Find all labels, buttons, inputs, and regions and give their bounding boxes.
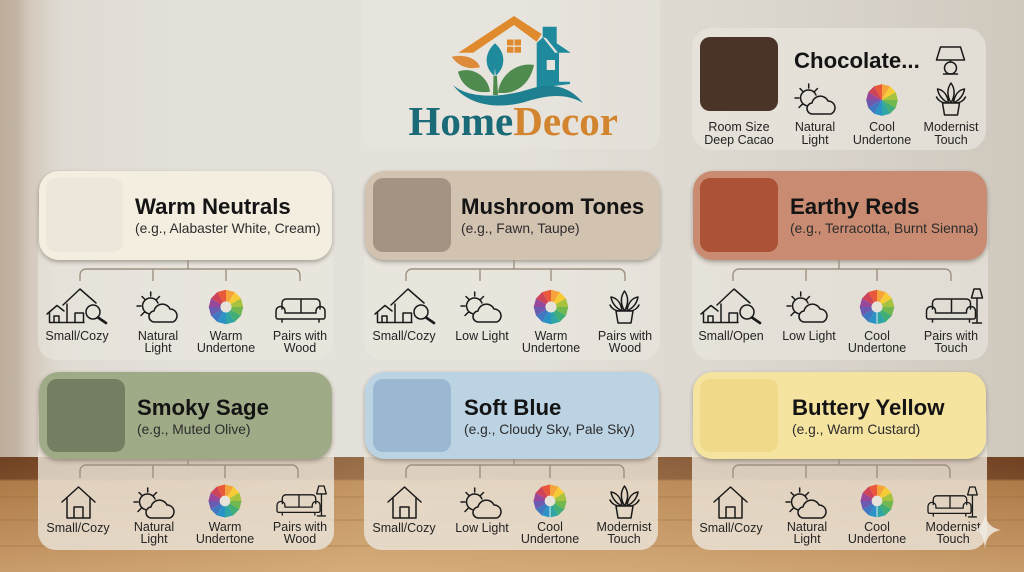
icon: sun and cloud [786, 488, 826, 518]
icon: sun and cloud [795, 84, 835, 114]
icon: sun and cloud [461, 292, 501, 322]
icon: color wheel [534, 290, 568, 324]
label: Natural [787, 520, 827, 534]
header [693, 372, 986, 459]
panel: Warm Neutrals [38, 171, 333, 360]
label: Modernist [597, 520, 652, 534]
label: Undertone [197, 341, 255, 355]
panel: Soft Blue [364, 372, 659, 550]
label: Undertone [196, 532, 254, 546]
heading: Smoky Sage [137, 395, 269, 420]
label: Undertone [848, 341, 906, 355]
icon: sun and cloud [134, 488, 174, 518]
label: Low Light [782, 329, 836, 343]
panel: logo [362, 0, 660, 149]
label: Undertone [521, 532, 579, 546]
label: Light [140, 532, 168, 546]
label: Modernist [924, 120, 979, 134]
swatch [700, 178, 778, 252]
icon: color wheel [860, 484, 894, 518]
swatch [373, 178, 451, 252]
subheading: (e.g., Cloudy Sky, Pale Sky) [464, 422, 635, 437]
label: Natural [795, 120, 835, 134]
label: Wood [284, 341, 316, 355]
label: Touch [934, 341, 968, 355]
icon: sun and cloud [137, 292, 177, 322]
label: Small/Cozy [372, 521, 436, 535]
label: Wood [609, 341, 641, 355]
label: Cool [537, 520, 563, 534]
icon: sofa [276, 299, 325, 322]
label: Low Light [455, 329, 509, 343]
subheading: (e.g., Muted Olive) [137, 422, 250, 437]
icon: color wheel [209, 290, 243, 324]
label: Small/Cozy [45, 329, 109, 343]
icon: color wheel [208, 484, 242, 518]
label: Light [793, 532, 821, 546]
icon: plant [610, 291, 639, 323]
header [693, 171, 987, 260]
subheading: (e.g., Fawn, Taupe) [461, 221, 580, 236]
label: Small/Cozy [372, 329, 436, 343]
header [39, 171, 332, 260]
label: Warm [210, 329, 242, 343]
heading: Chocolate... [794, 48, 920, 73]
swatch [46, 178, 123, 252]
label: Cool [864, 329, 890, 343]
label: Pairs with [273, 520, 327, 534]
label: Natural [138, 329, 178, 343]
label: Light [144, 341, 172, 355]
label: Pairs with [598, 329, 652, 343]
panel: Chocolate [692, 28, 986, 150]
label: Cool [864, 520, 890, 534]
icon: color wheel [866, 84, 898, 116]
icon: sofa with lamp [277, 486, 326, 516]
icon: sofa with lamp [926, 289, 982, 323]
label: Touch [936, 532, 970, 546]
wood floor [0, 457, 1024, 572]
panel: Earthy Reds [692, 171, 988, 360]
icon: house with magnifier [375, 289, 434, 323]
label: Cool [869, 120, 895, 134]
label: Small/Cozy [699, 521, 763, 535]
icon: house and leaves logo [452, 16, 583, 106]
icon: sparkle [975, 512, 1001, 549]
icon: house [714, 487, 747, 518]
label: Small/Open [698, 329, 764, 343]
icon: sun and cloud [787, 292, 827, 322]
label: Undertone [522, 341, 580, 355]
subheading: (e.g., Terracotta, Burnt Sienna) [790, 221, 978, 236]
label: Pairs with [924, 329, 978, 343]
icon: house [388, 487, 421, 518]
label: Modernist [926, 520, 981, 534]
icon: house [62, 487, 95, 518]
icon: plant [936, 83, 966, 115]
panel: Buttery Yellow [692, 372, 987, 550]
label: Touch [934, 133, 968, 147]
panel: Mushroom Tones [364, 171, 660, 360]
icon: house with magnifier [701, 289, 760, 323]
icon: sun and cloud [461, 488, 501, 518]
label: Light [801, 133, 829, 147]
header [365, 372, 659, 459]
label: Undertone [848, 532, 906, 546]
label: Wood [284, 532, 316, 546]
icon: sofa with lamp [928, 487, 977, 517]
icon: color wheel [860, 290, 894, 324]
heading: Warm Neutrals [135, 194, 291, 219]
swatch [373, 379, 451, 452]
label: Small/Cozy [46, 521, 110, 535]
subheading: (e.g., Alabaster White, Cream) [135, 221, 321, 236]
swatch [700, 379, 778, 452]
panel: Smoky Sage [38, 372, 334, 550]
icon: plant [610, 486, 639, 518]
swatch [47, 379, 125, 452]
label: Pairs with [273, 329, 327, 343]
heading: Earthy Reds [790, 194, 919, 219]
icon: house with magnifier [47, 289, 106, 323]
label: Warm [209, 520, 241, 534]
heading: Mushroom Tones [461, 194, 644, 219]
heading: Buttery Yellow [792, 395, 945, 420]
label: Warm [535, 329, 567, 343]
label: Touch [607, 532, 641, 546]
subheading: (e.g., Warm Custard) [792, 422, 920, 437]
label: Room Size [708, 120, 770, 134]
swatch [700, 37, 778, 111]
heading: Soft Blue [464, 395, 561, 420]
label: Natural [134, 520, 174, 534]
label: Low Light [455, 521, 509, 535]
label: Deep Cacao [704, 133, 774, 147]
header [365, 171, 660, 260]
icon: table lamp [936, 47, 964, 74]
logo wordmark: HomeDecor [408, 98, 618, 144]
label: Undertone [853, 133, 911, 147]
icon: color wheel [533, 484, 567, 518]
header [39, 372, 332, 459]
